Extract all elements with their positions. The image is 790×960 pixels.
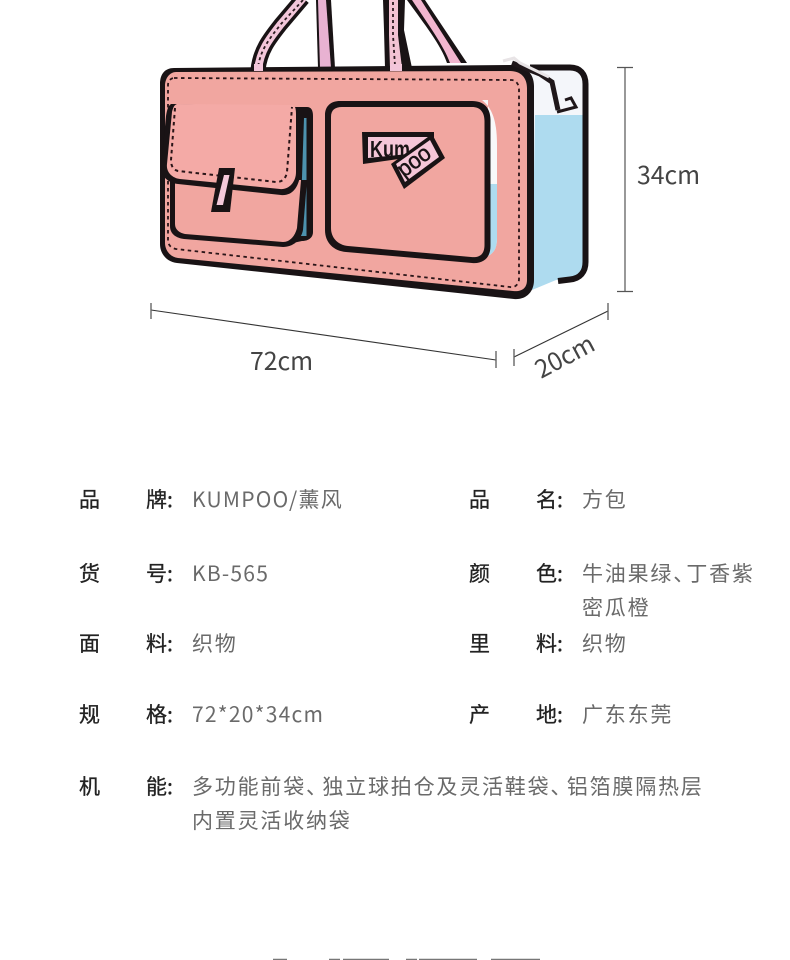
left pocket [161, 104, 313, 247]
logo patch: Kumpoo [362, 132, 445, 189]
spec: lining label end: 料: [536, 628, 563, 658]
bag front face [160, 64, 534, 299]
spec: function value: 内置灵活收纳袋 [192, 805, 352, 835]
spec: origin label end: 地: [536, 699, 563, 729]
spec: size label end: 格: [146, 699, 173, 729]
dimension: height 34cm: 34cm [637, 156, 700, 192]
cropped heading strokes at bottom edge [273, 958, 540, 960]
spec: function label: 机 [79, 771, 100, 801]
spec: function value [192, 771, 704, 835]
spec: outer material label end: 料: [146, 628, 173, 658]
spec: outer material label: 面 [79, 628, 100, 658]
spec: size value: 72*20*34cm [192, 699, 324, 729]
dimension: width 72cm [151, 303, 496, 378]
spec: item number label: 货 [79, 558, 100, 588]
logo patch: Kumpoo: Kum [370, 136, 410, 162]
dimension: height 34cm [617, 67, 700, 292]
spec: item number value: KB-565 [192, 558, 269, 588]
spec: brand value: KUMPOO/薰风 [192, 484, 343, 514]
spec: name label end: 名: [536, 484, 563, 514]
right pocket [325, 100, 497, 263]
dimension: depth 20cm: 20cm [528, 325, 601, 386]
bag handles [258, 0, 467, 70]
dimension: depth 20cm [514, 303, 608, 386]
spec: colour label: 颜 [469, 558, 490, 588]
spec: lining label: 里 [469, 628, 490, 658]
spec: colour value: 密瓜橙 [582, 592, 650, 622]
spec: lining value: 织物 [582, 628, 628, 658]
spec: function value: 多功能前袋、独立球拍仓及灵活鞋袋、铝箔膜隔热层 [192, 771, 704, 801]
bag side panel [528, 68, 586, 290]
spec: origin label: 产 [469, 699, 490, 729]
spec table [79, 484, 755, 835]
spec: name value: 方包 [582, 484, 628, 514]
spec: item number label end: 号: [146, 558, 173, 588]
spec: size label: 规 [79, 699, 100, 729]
zipper pull [503, 58, 576, 112]
spec: name label: 品 [469, 484, 490, 514]
product illustration: bag with dimension lines [150, 0, 700, 386]
spec: function label end: 能: [146, 771, 173, 801]
buckle tab [211, 168, 235, 212]
spec: colour value [582, 558, 755, 622]
logo patch: Kumpoo: poo [391, 140, 436, 182]
spec: brand label end: 牌: [146, 484, 173, 514]
spec: brand label: 品 [79, 484, 100, 514]
spec: colour label end: 色: [536, 558, 563, 588]
spec: outer material value: 织物 [192, 628, 238, 658]
spec: colour value: 牛油果绿、丁香紫 [582, 558, 755, 588]
dimension: width 72cm: 72cm [250, 342, 313, 378]
spec: origin value: 广东东莞 [582, 699, 673, 729]
